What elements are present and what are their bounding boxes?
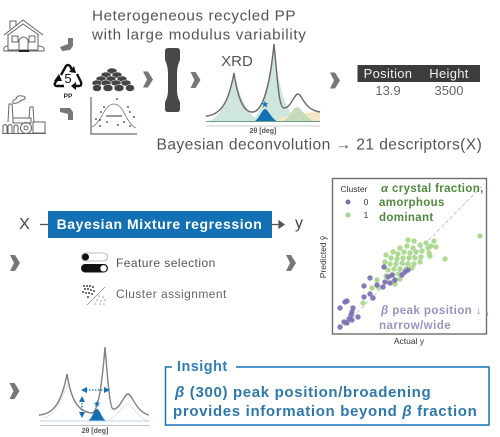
icon: recycling symbol 5 PP bbox=[54, 65, 81, 100]
text: Bayesian deconvolution: Bayesian deconvolution → 21 descriptors(X) bbox=[156, 136, 482, 154]
arrow: left chevron bottom row bbox=[10, 383, 20, 399]
chart: XRD deconvolution: XRD bbox=[221, 53, 253, 70]
heading: recycled PP bbox=[91, 8, 307, 44]
annotation: alpha cluster: amorphous bbox=[379, 197, 445, 209]
chart: actual vs predicted scatter bbox=[318, 178, 489, 346]
icon: recycling symbol 5 PP: 5 bbox=[64, 71, 72, 86]
heading: recycled PP: with large modulus variability bbox=[91, 26, 307, 44]
box: Bayesian Mixture regression: Bayesian Mixture regression bbox=[57, 216, 262, 232]
legend: cluster: Cluster bbox=[341, 184, 368, 194]
text: X input: X bbox=[19, 216, 30, 233]
table: position and height bbox=[358, 65, 480, 98]
arrow: box to y bbox=[272, 221, 284, 228]
panel: insight callout bbox=[166, 359, 489, 425]
text: insight body: provides information beyond β fraction bbox=[173, 403, 477, 420]
legend: cluster bbox=[341, 184, 369, 220]
icon: cluster assignment bbox=[82, 285, 106, 305]
annotation: beta cluster: β peak position ↓ , bbox=[380, 304, 489, 317]
annotation: beta cluster bbox=[379, 304, 489, 332]
chart: insight peak diagram: 2θ [deg] bbox=[82, 428, 108, 435]
annotation: alpha cluster: α crystal fraction, bbox=[381, 183, 484, 195]
legend: cluster: 1 bbox=[364, 210, 369, 220]
annotation: alpha cluster bbox=[379, 183, 484, 224]
chart: XRD deconvolution: 2θ [deg] bbox=[250, 128, 276, 135]
heading: insight: Insight bbox=[177, 359, 228, 375]
icon: distribution scatter bbox=[91, 97, 137, 134]
arrow: factory to PP bbox=[60, 108, 73, 120]
arrow: specimen to XRD bbox=[190, 72, 200, 88]
icon: pellet pile bbox=[92, 68, 134, 92]
text: insight body bbox=[173, 384, 477, 420]
icon: recycling symbol 5 PP: PP bbox=[64, 93, 73, 100]
chart: XRD deconvolution: ★ bbox=[261, 100, 269, 109]
chart: insight peak diagram: ★ bbox=[94, 400, 100, 408]
icon: factory bbox=[2, 96, 46, 134]
text: insight body: β (300) peak position/broadening bbox=[174, 384, 431, 401]
annotation: alpha cluster: dominant bbox=[379, 212, 434, 224]
legend: cluster: 0 bbox=[364, 197, 369, 207]
chart: insight peak diagram bbox=[39, 347, 150, 435]
axis label: predicted: Predicted ŷ bbox=[318, 235, 328, 278]
annotation: beta cluster: narrow/wide bbox=[379, 319, 451, 332]
arrow: house to PP bbox=[60, 38, 73, 51]
scatter points: cluster 1 bbox=[360, 233, 483, 306]
box: Bayesian Mixture regression bbox=[48, 211, 272, 238]
line: X to box bbox=[40, 224, 48, 226]
icon: dogbone tensile specimen bbox=[165, 48, 180, 112]
arrow: right chevron middle row bbox=[286, 255, 296, 271]
text: feature selection: Feature selection bbox=[116, 256, 216, 270]
text: y output: y bbox=[295, 215, 303, 232]
table: position and height: 13.9 bbox=[375, 83, 401, 98]
table: position and height: 3500 bbox=[435, 83, 463, 98]
chart: XRD deconvolution bbox=[206, 44, 320, 135]
arrow: left chevron middle row bbox=[10, 255, 20, 271]
table: position and height: Height bbox=[429, 66, 469, 81]
table: position and height: Position bbox=[364, 66, 412, 81]
arrow: materials to specimen bbox=[143, 72, 153, 88]
text: cluster assignment: Cluster assignment bbox=[116, 287, 227, 301]
icon: house bbox=[4, 20, 44, 51]
heading: recycled PP: Heterogeneous recycled PP bbox=[92, 8, 296, 24]
scatter points: cluster 0 bbox=[337, 264, 411, 330]
arrow: XRD to table bbox=[330, 72, 340, 88]
axis label: actual: Actual y bbox=[394, 336, 425, 346]
icon: toggles bbox=[81, 253, 108, 272]
